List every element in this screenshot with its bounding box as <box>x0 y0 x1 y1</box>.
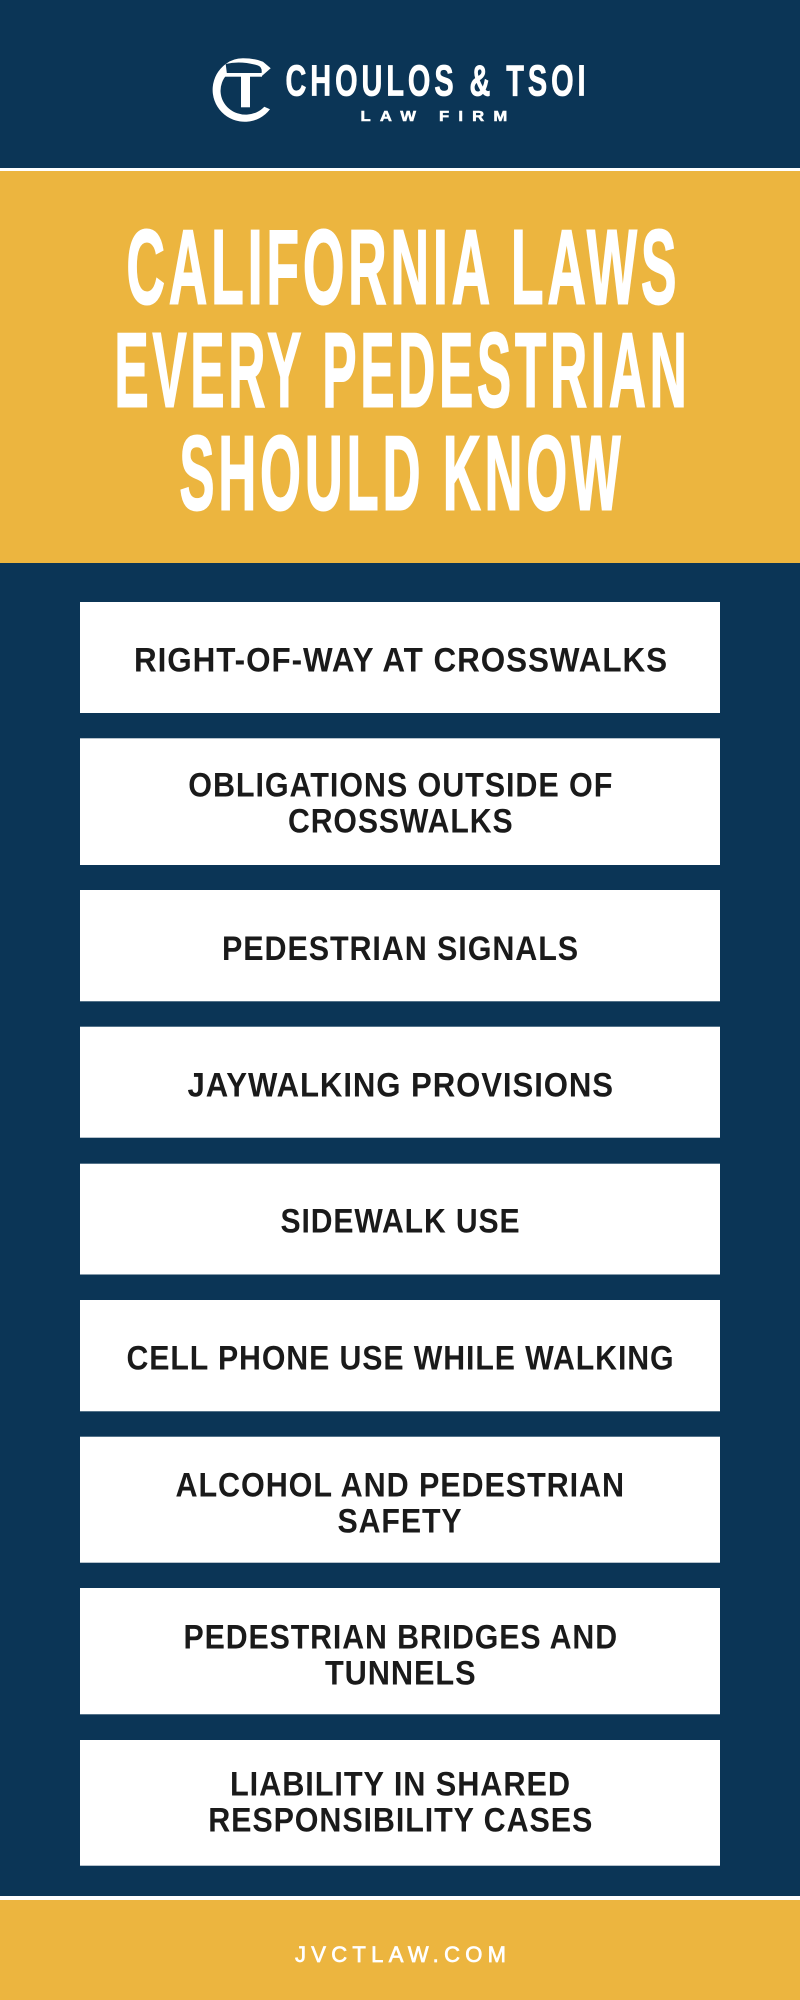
footer panel <box>0 1900 800 2000</box>
title panel <box>0 171 800 563</box>
firm name: CHOULOS & TSOI <box>286 56 590 106</box>
item: jaywalking provisions <box>80 1027 720 1138</box>
divider line under header <box>0 168 800 171</box>
item: alcohol and pedestrian safety: ALCOHOL AND PEDESTRIAN <box>176 1467 625 1505</box>
logo: Choulos & Tsoi Law Firm <box>213 56 590 125</box>
item: pedestrian bridges and tunnels <box>80 1588 720 1714</box>
divider line above footer <box>0 1896 800 1900</box>
item: right-of-way at crosswalks: RIGHT-OF-WAY AT CROSSWALKS <box>134 642 668 680</box>
item: pedestrian bridges and tunnels: PEDESTRIAN BRIDGES AND <box>184 1618 618 1656</box>
item: obligations outside of crosswalks: OBLIGATIONS OUTSIDE OF <box>188 767 613 805</box>
item: right-of-way at crosswalks <box>80 602 720 713</box>
item: pedestrian signals <box>80 890 720 1001</box>
item: liability in shared responsibility cases <box>80 1740 720 1866</box>
item: pedestrian signals: PEDESTRIAN SIGNALS <box>222 930 579 968</box>
item: liability in shared responsibility cases: RESPONSIBILITY CASES <box>208 1801 593 1839</box>
item: sidewalk use <box>80 1164 720 1274</box>
firm subtitle: LAW FIRM <box>360 109 516 125</box>
item: liability in shared responsibility cases: LIABILITY IN SHARED <box>230 1765 571 1803</box>
website url: JVCTLAW.COM <box>295 1942 506 1967</box>
item: alcohol and pedestrian safety <box>80 1437 720 1563</box>
item: alcohol and pedestrian safety: SAFETY <box>338 1503 462 1541</box>
item: cell phone use while walking: CELL PHONE USE WHILE WALKING <box>126 1339 674 1377</box>
item: jaywalking provisions: JAYWALKING PROVISIONS <box>188 1067 614 1105</box>
item: cell phone use while walking <box>80 1300 720 1411</box>
item: obligations outside of crosswalks: CROSSWALKS <box>288 802 514 840</box>
item: pedestrian bridges and tunnels: TUNNELS <box>325 1654 476 1692</box>
icon: CT monogram <box>213 58 271 122</box>
item: obligations outside of crosswalks <box>80 738 720 865</box>
item: sidewalk use: SIDEWALK USE <box>280 1203 520 1241</box>
